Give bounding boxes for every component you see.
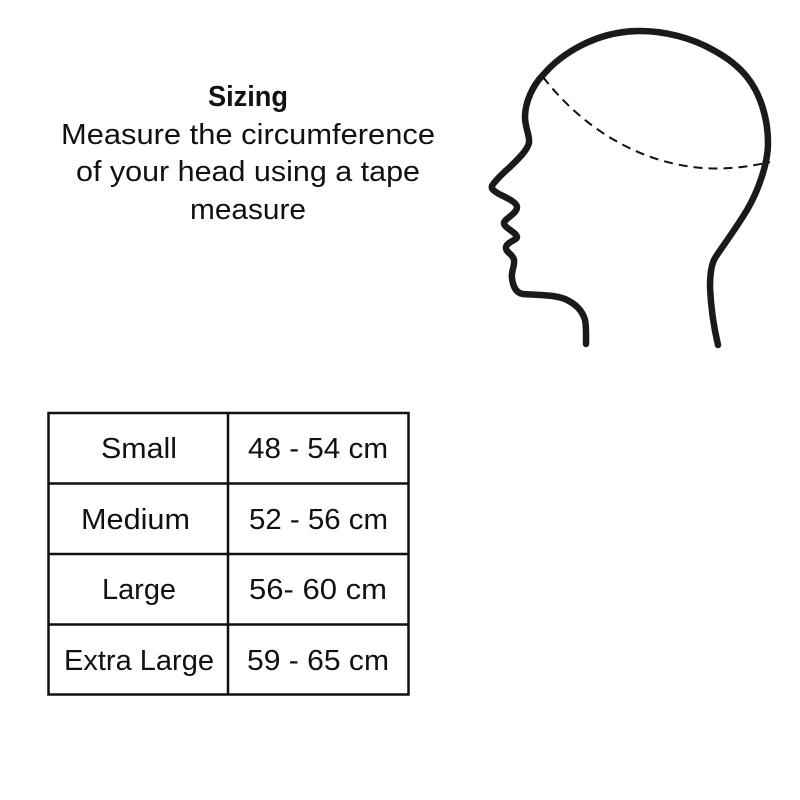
head outline [492,31,768,345]
row: Small: 48 - 54 cm [248,433,388,465]
row: Small: Small [101,433,177,465]
instruction line 3: measure [190,194,306,226]
dashed measuring line [543,77,770,168]
row: Large: 56- 60 cm [249,574,387,606]
heading and instructions [61,81,435,226]
row: Large: Large [102,574,176,606]
heading: Sizing: Sizing [208,81,288,113]
instruction line 1: Measure the circumference [61,119,435,151]
instruction line 2: of your head using a tape [76,156,420,188]
row: Medium: 52 - 56 cm [249,504,388,536]
row: Small [101,433,388,465]
row: Extra Large: 59 - 65 cm [247,645,389,677]
row: Medium [81,504,388,536]
row: Large [102,574,387,606]
table grid [48,413,408,694]
icon: head profile with measuring line [492,31,770,345]
sizing table [48,413,408,694]
row: Medium: Medium [81,504,190,536]
row: Extra Large: Extra Large [64,645,214,677]
row: Extra Large [64,645,389,677]
